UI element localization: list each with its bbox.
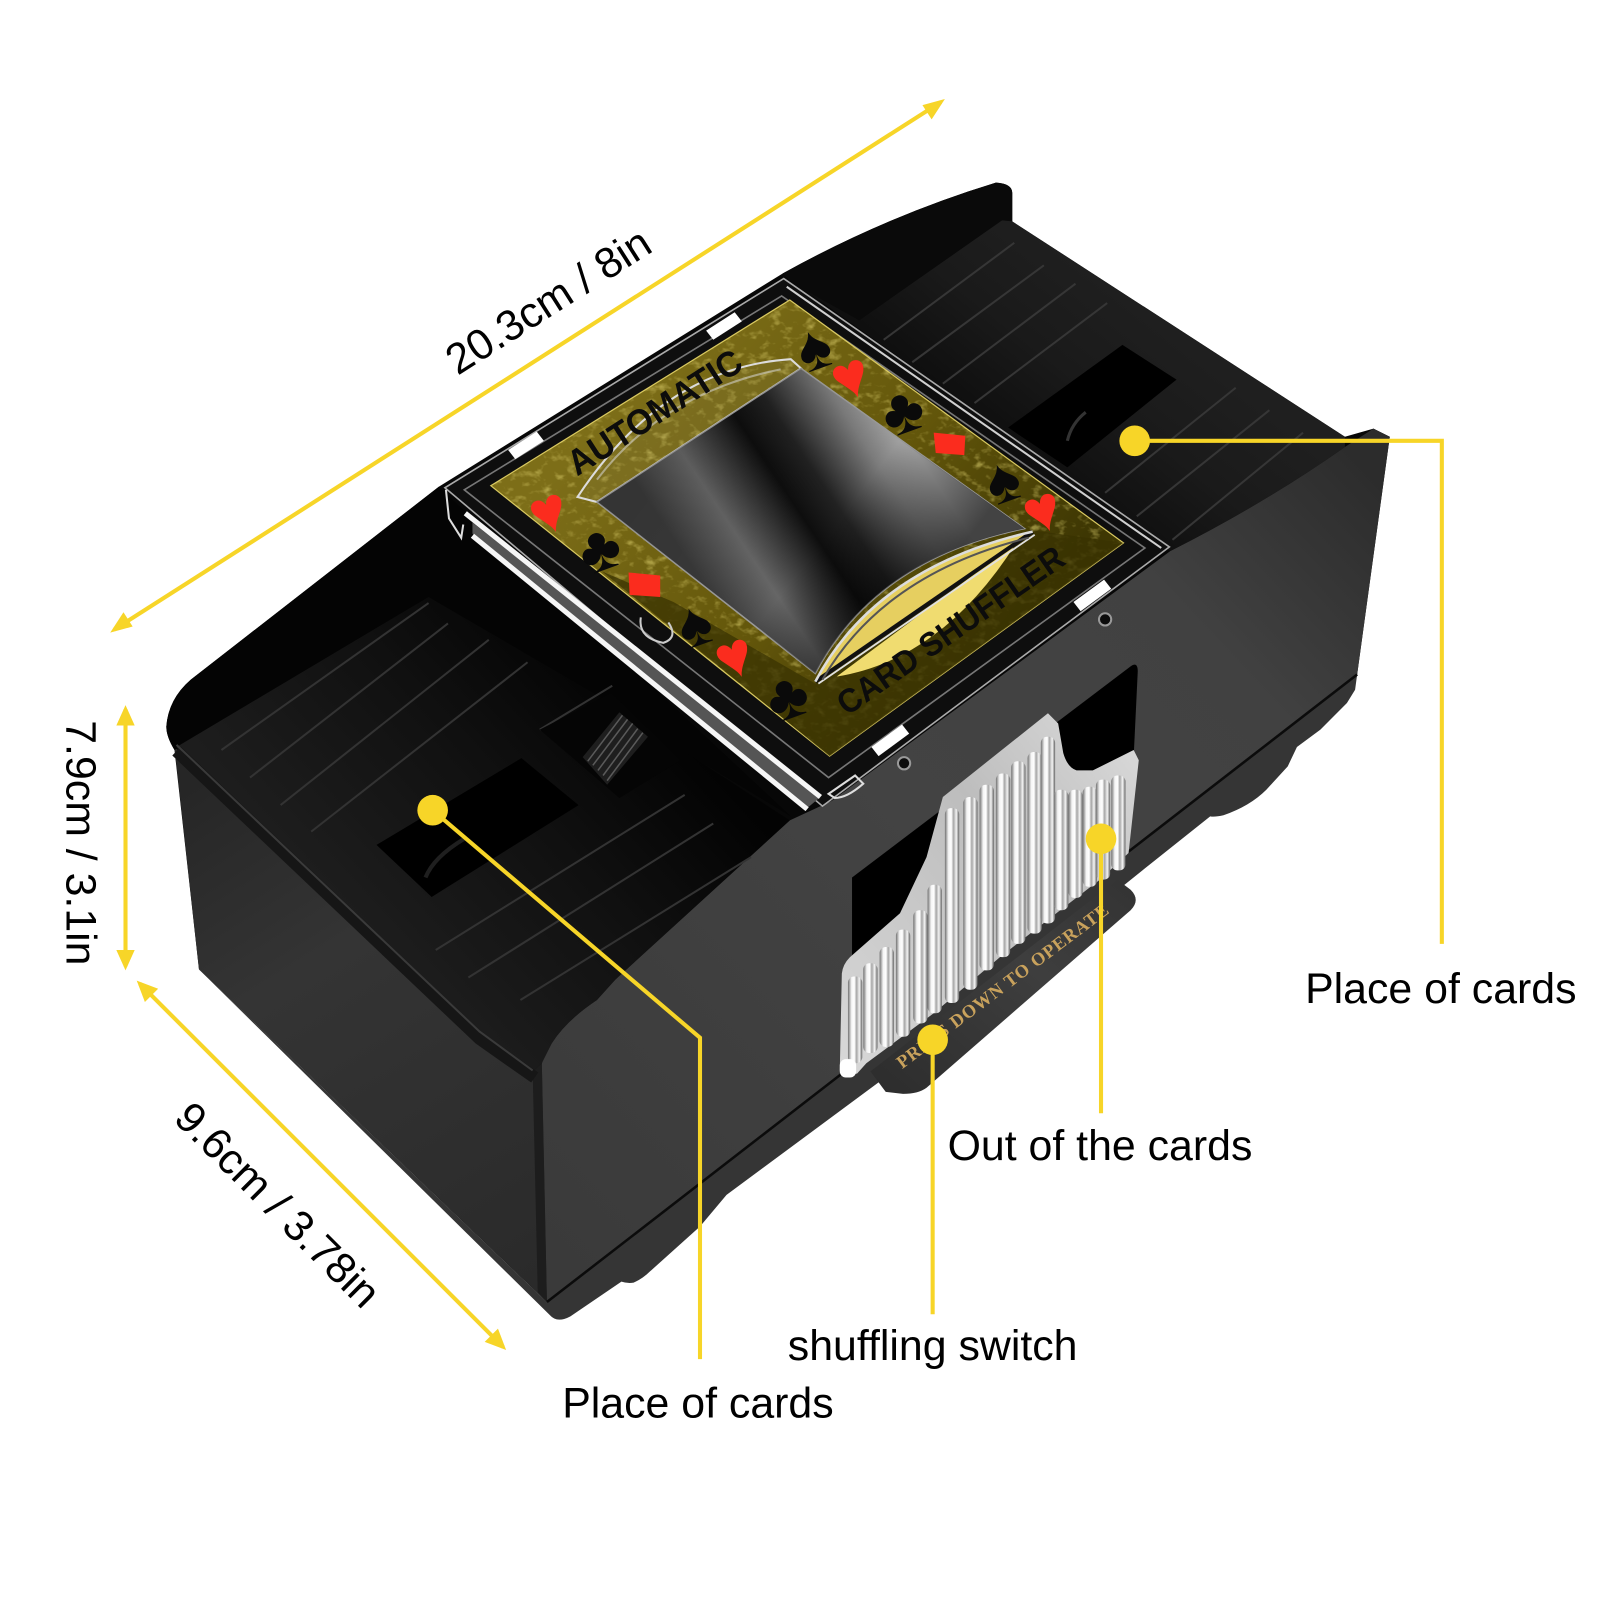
body silhouette (166, 183, 1390, 1302)
lid rail (472, 522, 820, 808)
dimension arrow: width (137, 981, 506, 1350)
suit symbols: ♣ (756, 657, 819, 737)
dimension label: length: 20.3cm / 8in (437, 218, 660, 384)
lid rail white edges (465, 513, 820, 809)
shuffle knob (583, 712, 648, 785)
right tray back wall (783, 183, 1012, 320)
lid frame (445, 279, 1169, 806)
dimension arrow: length (110, 99, 945, 633)
left tray ridges (221, 603, 751, 1000)
screws (898, 613, 1111, 769)
window glass (597, 368, 1024, 673)
callout: out of the cards (1086, 823, 1116, 1113)
callout: shuffling switch (917, 1024, 948, 1314)
callout: right card place (1119, 426, 1442, 944)
dimension label: height: 7.9cm / 3.1in (56, 720, 104, 966)
suit symbols: ♥ (821, 338, 880, 416)
clear switch comb (840, 713, 1139, 1078)
suit symbols: ♥ (1013, 471, 1072, 550)
press pad (870, 880, 1136, 1094)
corner clip (829, 776, 863, 798)
press down label: PRESS DOWN TO OPERATE (893, 900, 1112, 1072)
diamond symbols (629, 433, 965, 597)
gold card (491, 300, 1123, 756)
switch white foot (840, 1059, 856, 1078)
dimension label: width: 9.6cm / 3.78in (165, 1093, 389, 1317)
suit symbols: ♣ (568, 509, 631, 589)
suit symbols (519, 310, 1072, 737)
card exit opening (852, 665, 1138, 1051)
base seam (547, 674, 1357, 1302)
knob window (540, 693, 681, 798)
card shuffler label: CARD SHUFFLER (830, 539, 1072, 723)
lid outer lines (787, 287, 1161, 548)
left card slot (377, 758, 579, 897)
lens silver arcs (815, 532, 1033, 682)
bright gold reflection (837, 543, 1016, 677)
card shuffler product (166, 183, 1390, 1320)
switch ribs (848, 737, 1126, 1063)
suit symbols: ♠ (786, 310, 842, 387)
left tray (166, 487, 791, 1078)
left hinge clip (446, 490, 463, 538)
base plate with feet (199, 674, 1357, 1320)
right tray (783, 183, 1345, 551)
lid inner edge lines (464, 296, 1145, 778)
left end face (174, 747, 543, 1298)
label: right place of cards: Place of cards (1305, 965, 1577, 1013)
suit symbols: ♠ (667, 586, 722, 663)
label: out of the cards: Out of the cards (948, 1122, 1252, 1170)
left tray floor (177, 597, 790, 1071)
dome lens (815, 532, 1033, 682)
tray lip highlight (177, 745, 533, 1070)
darker lower band (602, 531, 1123, 756)
callout: left card place (417, 795, 700, 1359)
left tray back wall (166, 487, 791, 816)
long side face (542, 429, 1390, 1302)
suit symbols: ♥ (705, 617, 764, 696)
right card slot (1008, 345, 1177, 467)
dome inner arc (597, 369, 781, 480)
lens chord edge (815, 532, 1035, 684)
automatic label: AUTOMATIC (560, 341, 750, 483)
label: shuffling switch: shuffling switch (788, 1322, 1078, 1370)
dimension arrow: height (116, 705, 135, 970)
switch plate (840, 713, 1139, 1075)
lid: clear acrylic frame (445, 279, 1169, 809)
suit symbols: ♣ (871, 372, 934, 452)
label: left place of cards: Place of cards (562, 1379, 834, 1427)
corner strip (533, 1063, 547, 1302)
roller in right slot (1067, 412, 1086, 441)
roller in slot (426, 839, 464, 878)
gold foil mottling (491, 300, 1123, 756)
tray front lip (177, 751, 535, 1078)
glass shading (597, 368, 1024, 673)
suit symbols: ♠ (975, 442, 1030, 520)
right tray floor (806, 220, 1345, 551)
lid corner highlights (508, 312, 1111, 756)
dome upper crescent (578, 359, 801, 502)
right tray ridges (884, 243, 1303, 540)
suit symbols: ♥ (519, 472, 578, 551)
clear hinge clip (640, 617, 672, 643)
